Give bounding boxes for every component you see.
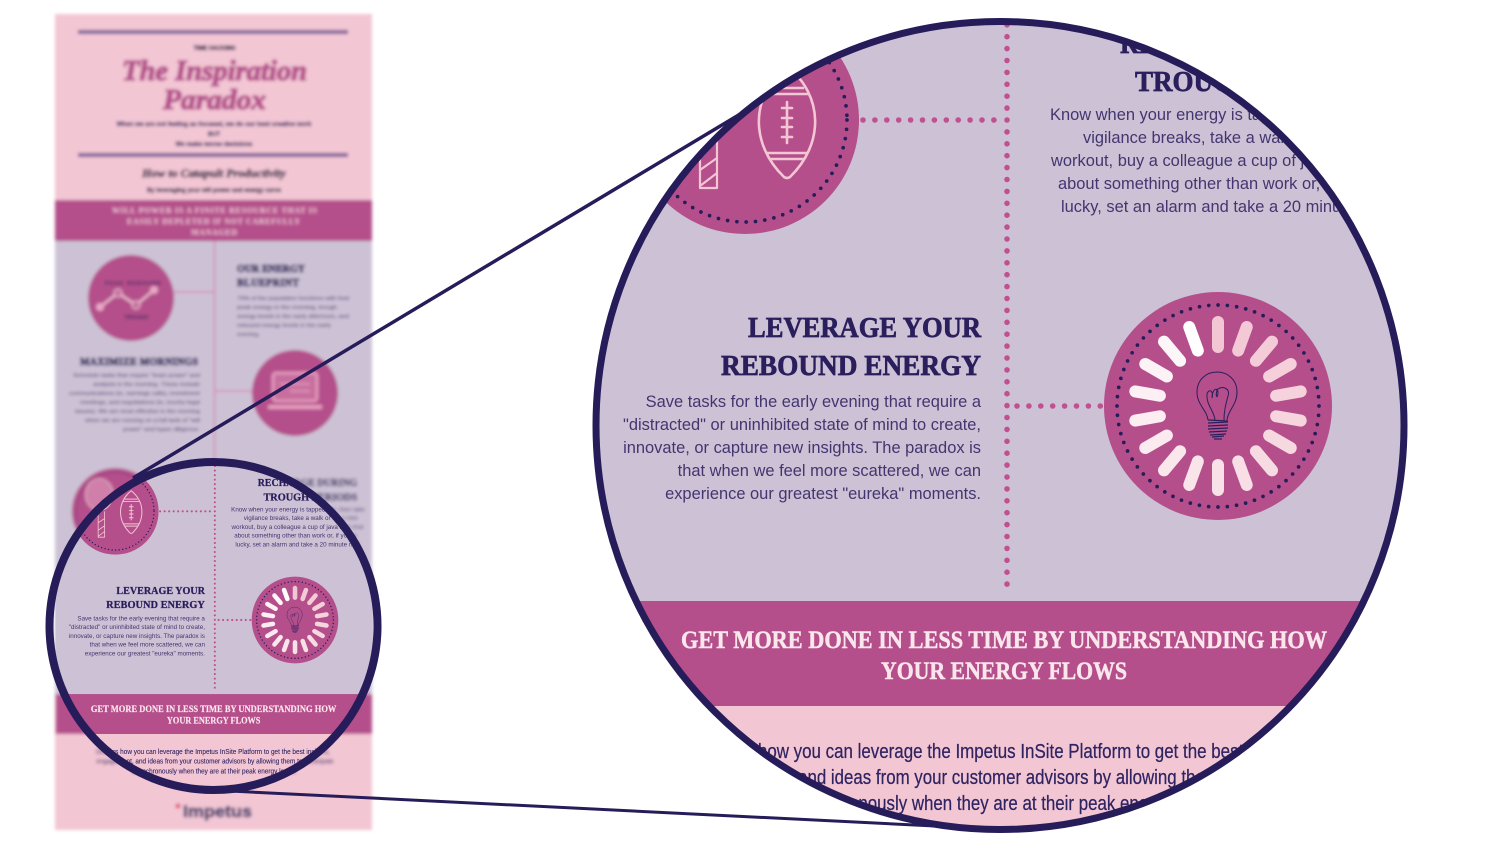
title: Paradox [162,85,266,116]
bottom banner text: YOUR ENERGY FLOWS [881,658,1127,685]
rule bottom [78,153,348,157]
magnifier: large ring [596,22,1404,830]
text: our energy blueprint: rebound energy levels in the early [237,323,331,329]
panel: blurred copy of lower section [56,466,373,786]
text: recharge during trough periods: workout, buy a colleague a cup of java and chat [1050,152,1399,170]
icon: football and racket [631,6,859,234]
call to action text [694,741,1320,815]
magnifier: small sharp lens content [56,466,373,786]
heading: recharge during trough periods [1120,29,1382,98]
page background [55,14,372,830]
text: maximize mornings: power" and hyper diligence. [123,427,200,433]
football [759,66,815,178]
text: maximize mornings: Schedule tasks that require "brain power" and [73,373,200,379]
text: recharge during trough periods: about something other than work or, if you're [1058,175,1382,193]
title [122,56,307,116]
text: leverage your rebound energy: Save tasks for the early evening that require a [646,393,982,411]
top banner text: WILL POWER IS A FINITE RESOURCE THAT IS [112,206,318,215]
text: leverage your rebound energy: innovate, or capture new insights. The paradox is [623,439,981,457]
section heading: How to Catapult Productivity [141,168,287,180]
title: The Inspiration [122,56,307,87]
magnifier: large lens [588,0,1423,844]
subtitle: We make worse decisions [176,142,253,148]
subtitle: When we are not feeling as focused, we do our best creative work [116,122,312,128]
heading: leverage your rebound energy: REBOUND ENERGY [721,351,981,382]
text: our energy blueprint: evening. [237,332,260,338]
text: leverage your rebound energy [623,393,982,503]
text: our energy blueprint: peak energy in the morning, trough [237,305,337,311]
icon: laptop [252,350,338,436]
subtitle [116,122,312,148]
call to action text: engagement, and ideas from your customer advisors by allowing them to participate [695,767,1320,789]
top banner [55,200,372,241]
lavender section [55,241,372,695]
bottom banner text: GET MORE DONE IN LESS TIME BY UNDERSTANDING HOW [681,627,1327,654]
magnifier: small ring [50,462,378,790]
text: recharge during trough periods: Know when your energy is tapped out, then take [1050,106,1402,124]
heading: leverage your rebound energy [721,313,982,382]
kicker: TIME HACKING [194,46,236,52]
text: our energy blueprint: 75% of the population functions with their [237,296,350,302]
section subheading: By leveraging your will power and energy curve [147,187,281,194]
lens background [592,18,1408,833]
heading: maximize mornings: MAXIMIZE MORNINGS [80,357,198,368]
dotted timeline [863,1,1101,594]
subtitle: BUT [208,132,220,138]
bottom banner text [681,627,1327,685]
text: maximize mornings: when we are running on a full tank of "will [84,418,200,424]
lavender area [56,466,373,694]
lens content [588,0,1423,844]
icon: energy curve: TROUGH [124,315,148,321]
heading: our energy blueprint: BLUEPRINT [237,278,299,289]
icon: energy curve [88,255,174,341]
heading: recharge during trough periods: RECHARGE DURING [1120,29,1382,60]
text: maximize mornings: analysis in the morning. These include [93,382,201,388]
text: recharge during trough periods: vigilance breaks, take a walk or do a mini [1083,129,1383,147]
panel: blurred infographic page [55,14,373,830]
bottom banner [588,601,1423,706]
heading: our energy blueprint [237,264,306,289]
text: leverage your rebound energy: that when we feel more scattered, we can [678,462,981,480]
text: maximize mornings [69,373,201,433]
heading: our energy blueprint: OUR ENERGY [237,264,306,275]
icon: light bulb [1104,292,1332,520]
timeline [174,241,252,480]
icon: energy curve: PEAK REBOUND [105,281,161,287]
text: our energy blueprint [237,296,350,338]
logo: Impetus [183,802,252,821]
call to action text: asynchronously when they are at their peak energy levels. [790,793,1224,815]
text: maximize mornings: issues). We are most effective in the morning [75,409,200,415]
text: leverage your rebound energy: "distracted" or uninhibited state of mind to create, [623,416,981,434]
text: our energy blueprint: energy levels in the early afternoon, and [237,314,349,320]
heading: leverage your rebound energy: LEVERAGE YOUR [748,313,982,344]
connector: upper line [133,104,757,478]
call to action text: Discuss how you can leverage the Impetus InSite Platform to get the best insights, [694,741,1310,763]
text: recharge during trough periods: lucky, set an alarm and take a 20 minute nap. [1061,198,1391,216]
text: maximize mornings: communications (ie, earnings calls), investment [69,391,200,397]
racket [667,34,739,188]
text: leverage your rebound energy: experience our greatest "eureka" moments. [665,485,981,503]
connector: lower line [230,791,935,826]
text: recharge during trough periods [1050,106,1402,216]
top banner text: EASILY DEPLETED IF NOT CAREFULLY [127,217,300,226]
top banner text: MANAGED [191,228,237,237]
footer background [588,706,1423,844]
text: maximize mornings: meetings, and negotiations (ie, touchy legal [80,400,200,406]
top banner text [112,206,318,237]
rule top [78,30,348,34]
heading: recharge during trough periods: TROUGH PERIODS [1135,67,1382,98]
